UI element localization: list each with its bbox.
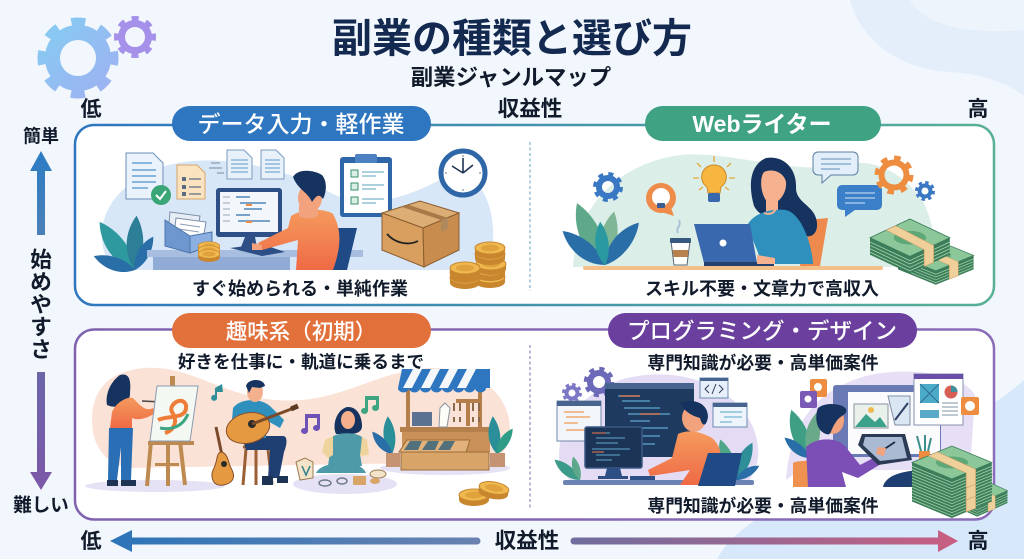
divider	[529, 142, 531, 291]
pill: hobby	[172, 313, 431, 348]
axis title: め	[30, 270, 52, 294]
coins on desk	[198, 242, 220, 254]
plant	[92, 215, 159, 279]
standing guitar	[212, 427, 233, 485]
pens	[919, 451, 930, 463]
illustration: data entry	[92, 150, 506, 289]
plants	[552, 455, 582, 485]
money	[947, 477, 1007, 517]
guitarist	[223, 380, 298, 485]
desk	[563, 480, 754, 485]
coffee	[671, 241, 690, 265]
monitor	[833, 385, 941, 457]
bottom axis title: 収益性	[495, 529, 559, 553]
axis title	[30, 248, 52, 362]
panel: hobby	[75, 313, 994, 520]
pill: data entry: データ入力・軽作業	[198, 111, 404, 137]
painter	[107, 374, 162, 486]
illustration: programming	[552, 369, 761, 486]
arrow up	[30, 151, 52, 235]
bottom axis label low: 低	[80, 530, 102, 553]
pill: hobby: 趣味系（初期）	[226, 320, 376, 344]
caption: web writer: スキル不要・文章力で高収入	[645, 279, 879, 299]
gears	[586, 369, 612, 395]
plant	[558, 199, 647, 274]
clipboard	[340, 157, 392, 217]
axis title: 始	[30, 248, 52, 272]
card	[914, 374, 963, 425]
table	[583, 266, 883, 270]
icons: music notes	[211, 384, 223, 401]
coder	[648, 431, 721, 485]
coins right	[450, 242, 506, 289]
axis end label easy: 簡単	[23, 126, 59, 146]
main monitor	[605, 383, 694, 457]
gears	[877, 158, 911, 192]
woman	[800, 218, 828, 266]
stall plants	[369, 416, 395, 458]
icon: blue gear	[595, 174, 621, 200]
axis title: す	[30, 316, 52, 340]
illustration: hobby	[85, 368, 517, 506]
icon: large gear	[42, 22, 114, 94]
arrow left	[110, 530, 481, 552]
arrow down	[30, 372, 52, 490]
axis end label hard: 難しい	[13, 494, 69, 516]
pill: web writer	[645, 106, 881, 141]
icon: idea bubble	[646, 183, 676, 216]
crafter	[296, 407, 386, 486]
bubbles	[813, 152, 858, 183]
box	[382, 201, 459, 228]
designer	[793, 461, 834, 487]
icons	[961, 397, 979, 415]
illustration: design	[782, 372, 1007, 518]
plant	[782, 407, 826, 463]
panel frame	[75, 125, 994, 305]
left window	[557, 401, 601, 441]
small monitor	[585, 427, 642, 468]
caption lower: 専門知識が必要・高単価案件	[647, 495, 879, 516]
icon: bulb	[702, 165, 726, 193]
tablet	[858, 434, 912, 465]
divider	[529, 345, 531, 510]
pill: programming and design	[608, 313, 917, 348]
caption: hobby: 好きを仕事に・軌道に乗るまで	[178, 352, 424, 372]
desk	[147, 250, 363, 257]
axis title: や	[30, 293, 52, 317]
bottom axis label high: 高	[968, 530, 988, 553]
tray with papers	[165, 212, 212, 253]
guitar	[223, 408, 273, 448]
illustration: web writer	[558, 152, 974, 285]
laptop	[694, 224, 757, 263]
title: 副業の種類と選び方	[332, 17, 692, 61]
pill: programming and design: プログラミング・デザイン	[627, 318, 897, 344]
top axis label: 収益性	[498, 97, 562, 121]
panel frame	[75, 330, 994, 520]
pill: web writer: Webライター	[692, 111, 832, 137]
code windows	[700, 378, 728, 398]
bottom axis	[80, 529, 988, 553]
caption: data entry: すぐ始められる・単純作業	[192, 278, 408, 299]
person	[258, 210, 339, 270]
arrow right	[570, 530, 958, 552]
axis title: さ	[30, 338, 52, 362]
jewelry	[296, 458, 313, 480]
chair	[315, 228, 357, 270]
icon: small gear	[116, 18, 154, 56]
top axis label high: 高	[968, 98, 988, 121]
easel	[147, 376, 198, 486]
vertical axis	[13, 126, 69, 516]
panel: data entry	[75, 106, 994, 305]
pill: data entry	[172, 106, 431, 141]
clock	[441, 151, 485, 195]
money	[898, 240, 974, 285]
stall	[369, 369, 517, 470]
caption upper: 専門知識が必要・高単価案件	[647, 352, 879, 373]
coins	[459, 479, 510, 506]
panel: web writer	[558, 106, 974, 299]
monitor	[216, 188, 282, 237]
top axis label low: 低	[80, 98, 102, 121]
subtitle: 副業ジャンルマップ	[411, 65, 611, 90]
stand	[883, 470, 930, 487]
panel: programming and design	[552, 313, 1007, 518]
